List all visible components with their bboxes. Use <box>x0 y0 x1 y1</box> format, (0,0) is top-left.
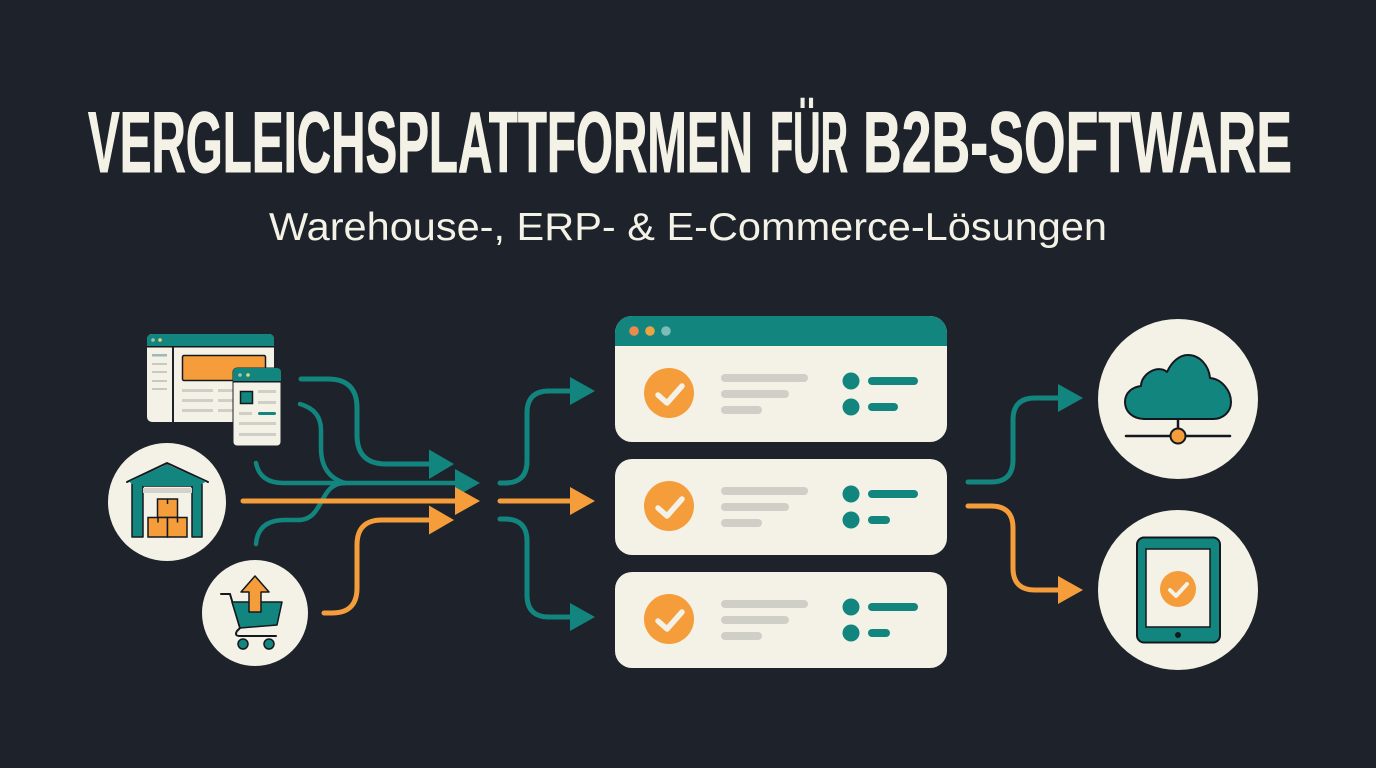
icon: check badge <box>644 594 694 644</box>
title: VERGLEICHSPLATTFORMEN <box>88 95 753 191</box>
arrow: to cloud <box>968 384 1083 482</box>
icon: browser windows source <box>147 334 281 446</box>
icon: check badge <box>644 481 694 531</box>
arrow: cart to comparison, orange <box>324 506 454 613</box>
arrow: browser to comparison, upper teal <box>301 379 454 479</box>
panel: top result card <box>615 316 947 442</box>
subtitle: Warehouse-, ERP- & E-Commerce-Lösungen <box>269 206 1107 249</box>
icon: shopping cart <box>202 560 308 666</box>
arrow: to bottom panel <box>500 519 595 631</box>
arrow: warehouse to comparison, orange <box>243 487 480 515</box>
arrow: to top panel <box>500 377 595 483</box>
icon: large browser window <box>147 334 274 422</box>
title: FÜR <box>770 95 848 191</box>
arrow: to tablet <box>968 506 1083 604</box>
arrow: to middle panel <box>500 487 595 515</box>
icon: check badge <box>644 368 694 418</box>
icon: warehouse <box>108 443 226 561</box>
icon: cloud network <box>1098 319 1258 479</box>
window title bar <box>615 316 947 346</box>
panel: middle result card <box>615 459 947 555</box>
icon: small browser window <box>233 368 281 446</box>
icon: tablet with check <box>1098 510 1258 670</box>
panel: bottom result card <box>615 572 947 668</box>
arrow: merging teal flows <box>256 404 480 544</box>
